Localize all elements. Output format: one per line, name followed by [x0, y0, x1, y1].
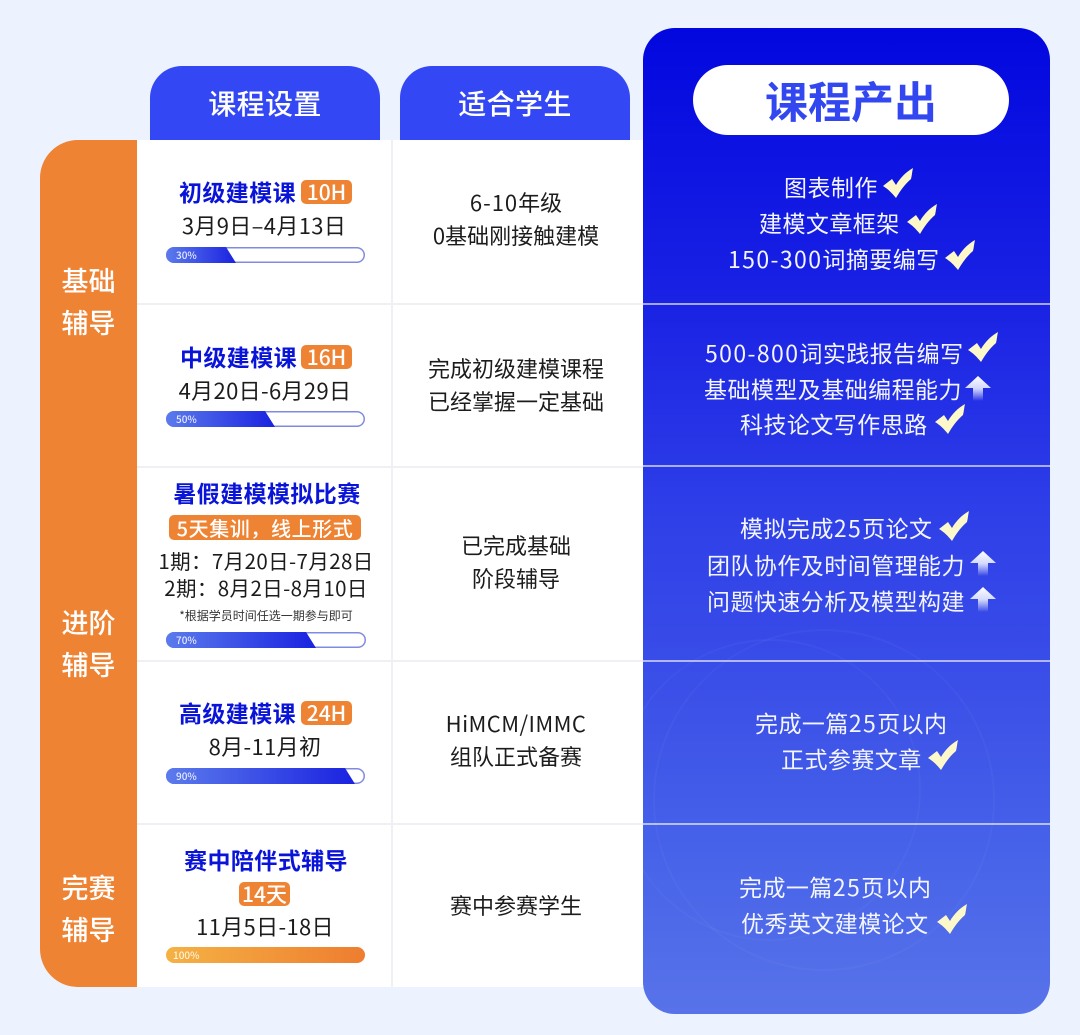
stage label: 进阶辅导: 进阶 [62, 602, 116, 641]
suitable students: row 3: 阶段辅导 [472, 562, 560, 594]
row 2 course: 中级建模课 [166, 339, 365, 427]
panel: stage column [40, 140, 137, 987]
suitable students: row 2: 完成初级建模课程 [428, 352, 604, 384]
output text: 图表制作: 图表制作 [784, 169, 878, 203]
row divider 2 [643, 465, 1050, 467]
suitable students: row 1 [433, 186, 599, 251]
output text: 150-300词摘要编写: 150-300词摘要编写 [728, 241, 940, 275]
session 1 dates: 1期：7月20日-7月28日 [158, 545, 374, 575]
row 4 course: 高级建模课 [166, 695, 365, 784]
suitable students: row 5: 赛中参赛学生 [450, 889, 582, 921]
column header: 课程设置 [150, 66, 380, 140]
suitable students: row 3 [461, 529, 571, 594]
progress bar: 30% [166, 247, 365, 263]
progress bar: 70% [166, 632, 366, 648]
note: *根据学员时间任选一期参与即可 [179, 607, 353, 624]
suitable students: row 3: 已完成基础 [461, 529, 571, 561]
row 1 course: 初级建模课 [166, 174, 365, 263]
course title: 赛中陪伴式辅导 [184, 842, 348, 876]
icon: check [907, 204, 937, 234]
suitable students: row 2: 已经掌握一定基础 [428, 385, 604, 417]
panel: 课程产出 [643, 28, 1050, 1014]
icon: check [935, 404, 965, 434]
badge: 16H: 16H [307, 342, 346, 372]
suitable students: row 4 [446, 707, 586, 772]
column header: 课程设置: 课程设置 [208, 83, 322, 123]
icon: up arrow [965, 376, 991, 400]
badge: 5天集训: 5天集训，线上形式 [177, 513, 353, 542]
output text: 科技论文写作思路: 科技论文写作思路 [740, 406, 928, 440]
session 2 dates: 2期：8月2日-8月10日 [164, 572, 368, 602]
icon: check [945, 240, 975, 270]
table body panel [137, 140, 657, 987]
panel title pill: 课程产出 [765, 69, 937, 131]
stage label: 基础辅导 [62, 260, 116, 341]
output text: 正式参赛文章: 正式参赛文章 [781, 741, 922, 775]
stage label: 完赛辅导: 辅导 [62, 909, 116, 948]
row divider 4 [643, 823, 1050, 825]
suitable students: row 1: 0基础刚接触建模 [433, 219, 599, 251]
progress bar: 90% [166, 768, 365, 784]
progress bar: 100% [166, 947, 365, 963]
course title: 初级建模课 [179, 174, 296, 208]
output text: 完成一篇25页以内: 完成一篇25页以内 [755, 705, 948, 739]
row 5 course: 赛中陪伴式辅导 [166, 842, 365, 963]
badge: 10H: 10H [307, 177, 346, 207]
column header: 适合学生 [400, 66, 630, 140]
progress bar: 50%: 50% [176, 411, 197, 426]
panel title pill [693, 65, 1009, 135]
progress bar: 90%: 90% [176, 768, 197, 783]
badge: 16H [301, 345, 352, 369]
badge: 14天: 14天 [242, 879, 287, 909]
row divider 3 [643, 660, 1050, 662]
dates: 4月20日-6月29日 [179, 374, 351, 406]
row and column dividers [137, 140, 643, 987]
row divider 1 [643, 303, 1050, 305]
suitable students: row 1: 6-10年级 [470, 186, 562, 218]
icon: check [883, 168, 913, 198]
badge: 10H [301, 180, 352, 204]
badge: 24H [301, 701, 352, 725]
course title: 中级建模课 [180, 339, 297, 373]
stage label: 基础辅导: 辅导 [62, 302, 116, 341]
output text: 优秀英文建模论文: 优秀英文建模论文 [741, 905, 929, 939]
course title: 高级建模课 [179, 695, 296, 729]
icon: check [928, 740, 958, 770]
icon: up arrow [970, 587, 996, 612]
stage label: 完赛辅导 [62, 867, 116, 948]
output text: 团队协作及时间管理能力: 团队协作及时间管理能力 [707, 547, 965, 581]
progress bar: 30%: 30% [176, 247, 197, 262]
stage label: 进阶辅导 [62, 602, 116, 683]
progress bar: 50% [166, 411, 365, 427]
output text: 完成一篇25页以内: 完成一篇25页以内 [739, 869, 932, 903]
column header: 适合学生: 适合学生 [458, 83, 572, 123]
stage label: 进阶辅导: 辅导 [62, 644, 116, 683]
suitable students: row 2 [428, 352, 604, 417]
course title: 暑假建模模拟比赛 [173, 475, 361, 509]
output text: 问题快速分析及模型构建: 问题快速分析及模型构建 [707, 583, 965, 617]
stage label: 基础辅导: 基础 [62, 260, 116, 299]
badge: 24H: 24H [307, 698, 346, 728]
dates: 11月5日-18日 [196, 910, 334, 942]
output text: 模拟完成25页论文: 模拟完成25页论文 [740, 510, 933, 544]
row 3 course: 暑假建模模拟比赛 [158, 475, 374, 648]
icon: up arrow [970, 551, 996, 576]
icon: check [939, 511, 969, 541]
output text: 基础模型及基础编程能力: 基础模型及基础编程能力 [704, 371, 962, 405]
icon: check [968, 332, 998, 362]
suitable students: row 4: 组队正式备赛 [450, 740, 582, 772]
progress bar: 100%: 100% [173, 947, 200, 962]
dates: 3月9日–4月13日 [182, 209, 346, 241]
progress bar: 70%: 70% [176, 632, 197, 647]
suitable students: row 4: HiMCM/IMMC [446, 707, 586, 739]
dates: 8月-11月初 [209, 730, 321, 762]
output text: 建模文章框架: 建模文章框架 [759, 205, 900, 239]
stage label: 完赛辅导: 完赛 [62, 867, 116, 906]
output text: 500-800词实践报告编写: 500-800词实践报告编写 [705, 335, 964, 369]
icon: check [937, 904, 967, 934]
